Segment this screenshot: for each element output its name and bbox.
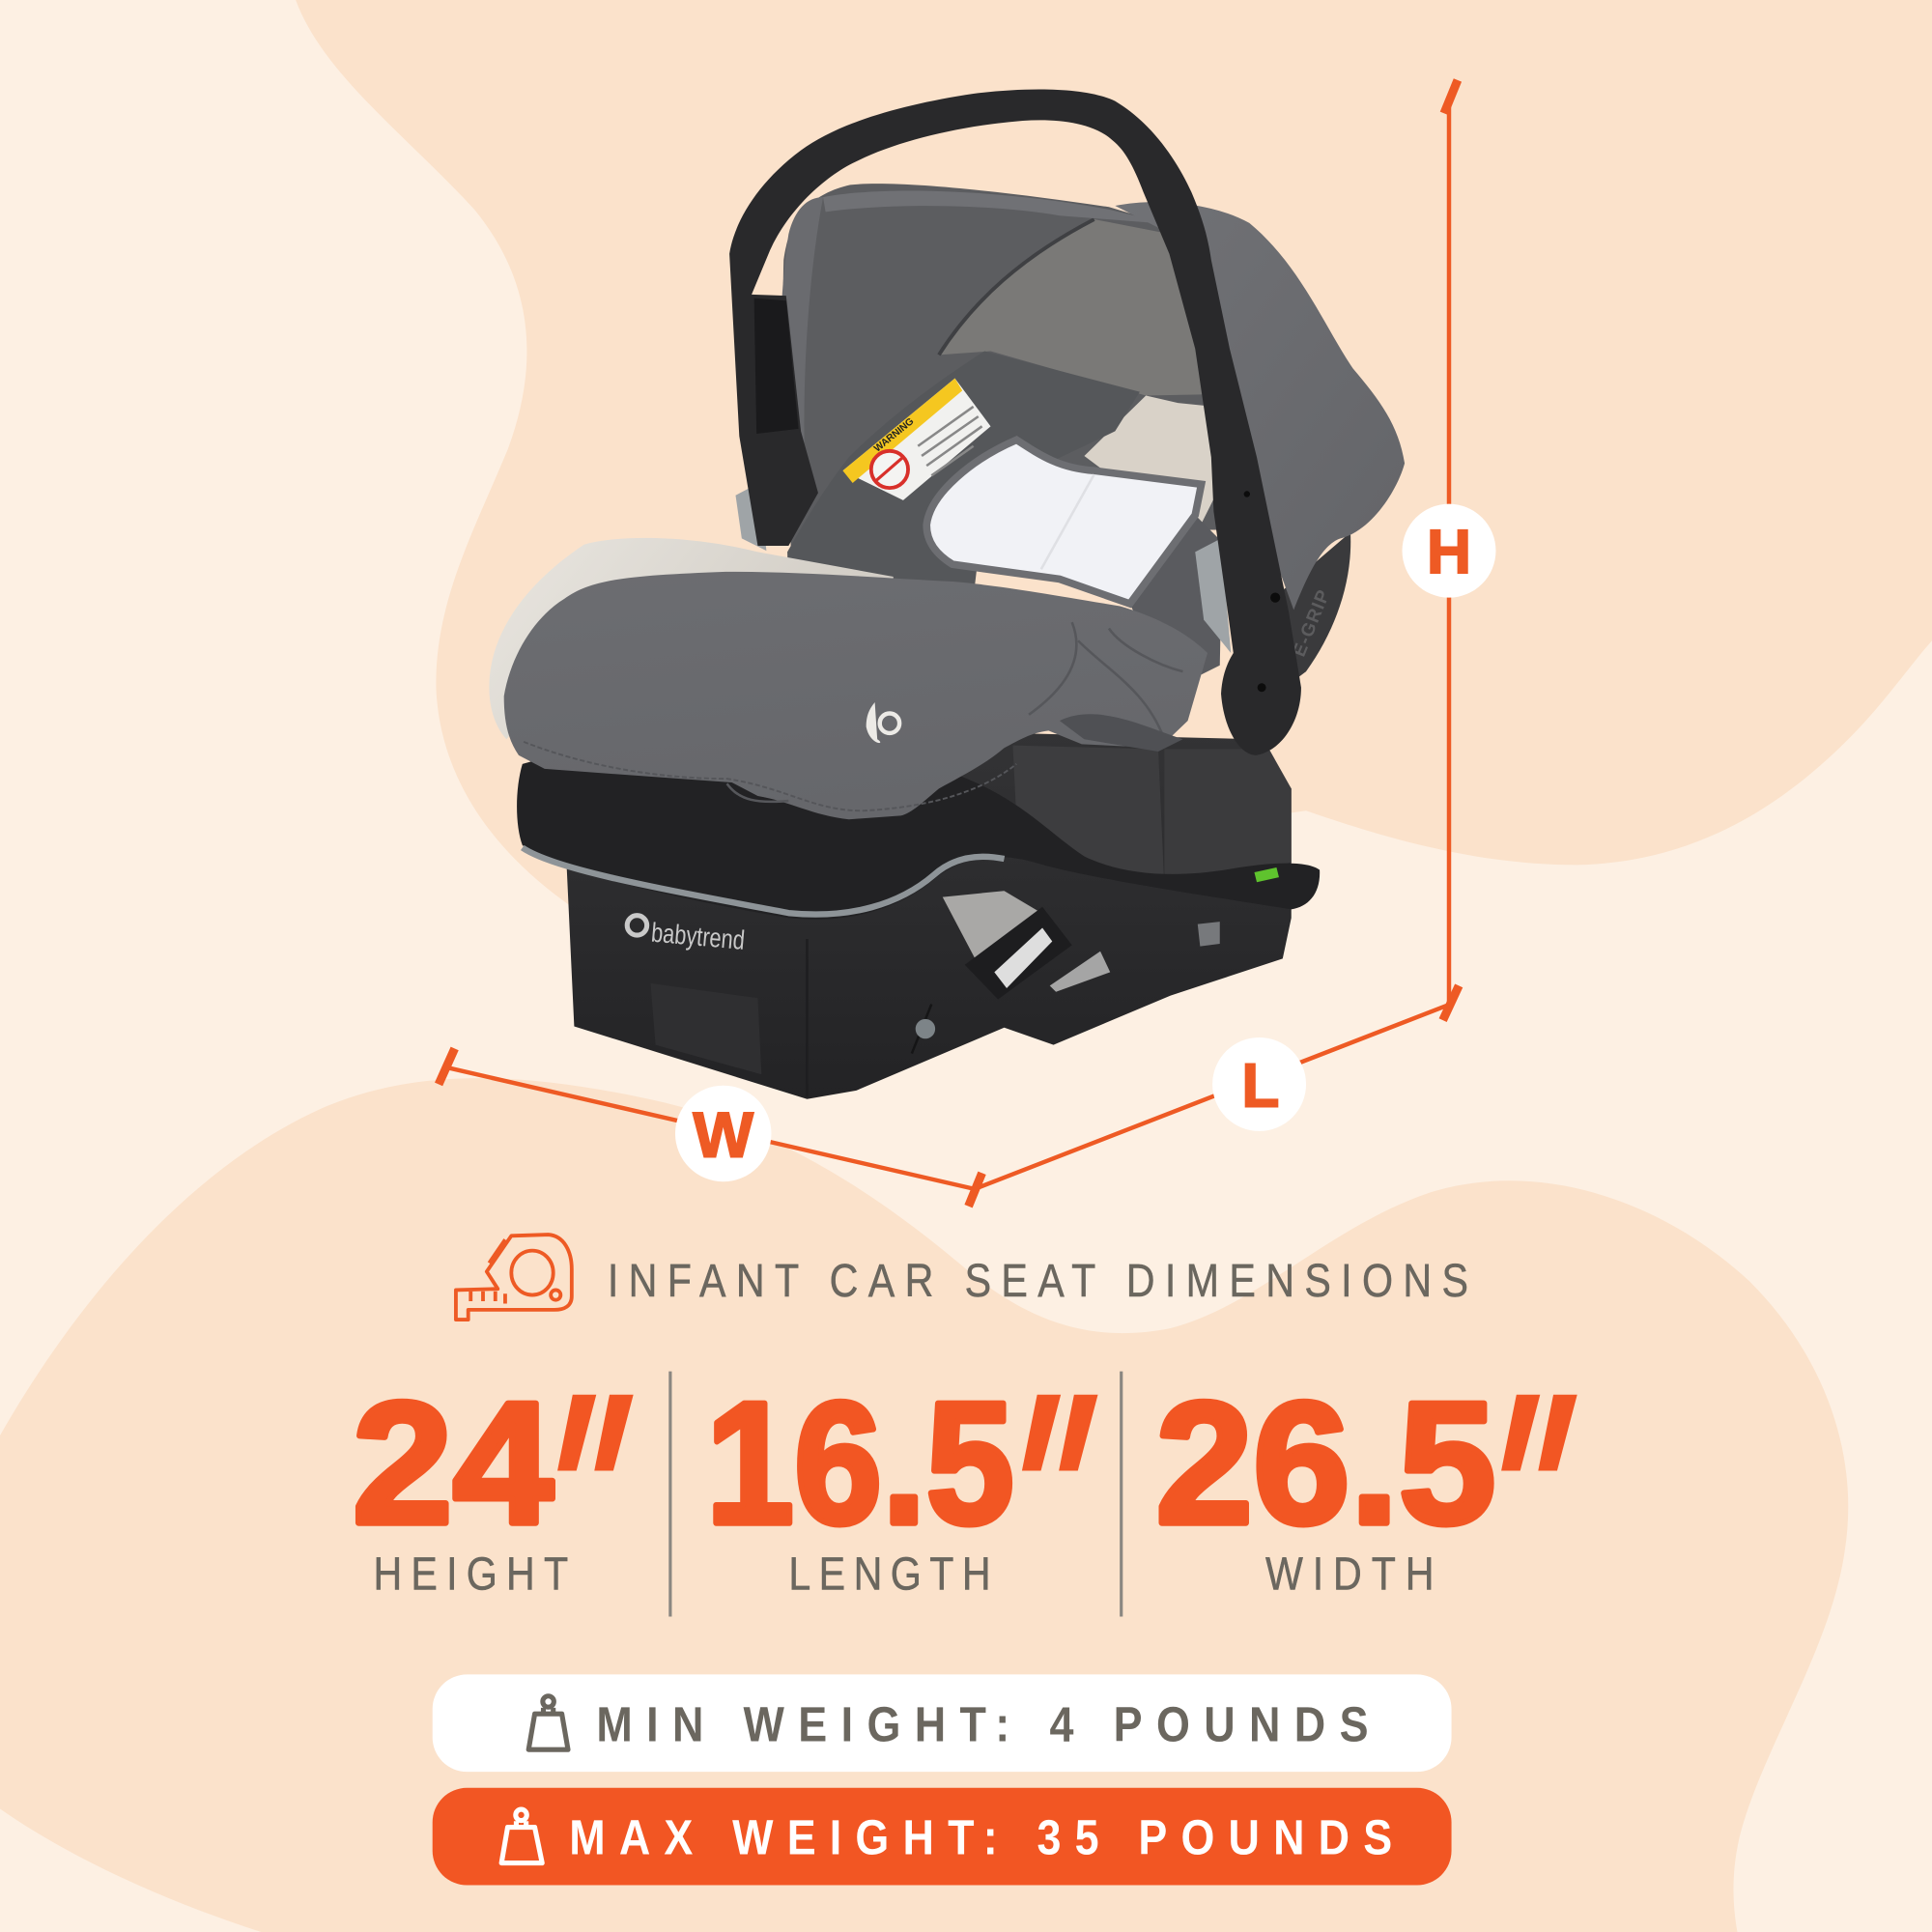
badge: W: W [693, 1100, 753, 1172]
footmuff logo [867, 702, 899, 743]
base tray [517, 752, 1320, 920]
canopy inner [777, 184, 1233, 557]
icon: weight [501, 1809, 542, 1863]
stat: length: " [962, 1328, 1124, 1669]
pill: min weight [433, 1674, 1452, 1772]
top background blob [296, 0, 1932, 912]
gray footmuff [504, 572, 1208, 819]
stat: height [353, 1328, 661, 1669]
badge: L [1212, 1037, 1306, 1131]
divider [1120, 1372, 1122, 1616]
product photo: infant car seat [489, 89, 1405, 1099]
stat: width [1155, 1328, 1605, 1669]
warning label: WARNING [872, 416, 916, 454]
pill: max weight [433, 1788, 1452, 1886]
stat: width: WIDTH [1265, 1547, 1435, 1600]
adjuster knob [912, 1005, 935, 1054]
back shell with E-GRIP [1282, 532, 1350, 690]
lower base box [567, 733, 1292, 1099]
badge: H [1403, 504, 1495, 598]
heading: INFANT CAR SEAT DIMENSIONS [608, 1254, 1468, 1307]
side clips [735, 483, 1231, 653]
dimension line: width [439, 1048, 982, 1207]
stat: length [706, 1328, 1124, 1669]
badge: W [675, 1086, 771, 1181]
dimension line: length [975, 1005, 1450, 1189]
icon: tape measure [456, 1235, 572, 1320]
badge: L: L [1241, 1050, 1279, 1120]
white body pad [926, 440, 1222, 690]
harness strap and buckle [943, 891, 1110, 999]
stat: height: " [497, 1328, 661, 1669]
divider [669, 1372, 671, 1616]
cream footmuff back [489, 538, 894, 739]
babytrend logo [627, 916, 746, 955]
seat cream lining [1084, 395, 1220, 524]
icon: weight [528, 1696, 568, 1749]
dimension line: height [1443, 80, 1459, 1020]
babytrend logo: babytrend [650, 918, 746, 955]
back shell with E-GRIP: E-GRIP [1290, 586, 1335, 660]
stat: width: " [1441, 1328, 1605, 1669]
bottom background blob [0, 1078, 1848, 1932]
carry handle [729, 89, 1301, 755]
stat: height: 24 [353, 1367, 554, 1561]
stat: height: HEIGHT [373, 1547, 568, 1600]
pill: min weight: MIN WEIGHT: 4 POUNDS [596, 1698, 1369, 1752]
badge: H: H [1427, 517, 1471, 586]
head pillow [787, 352, 1140, 598]
warning label [842, 379, 991, 500]
stat: length: LENGTH [788, 1547, 991, 1600]
stat: length: 16.5 [706, 1367, 1014, 1561]
canopy outer [1115, 202, 1405, 610]
pill: max weight: MAX WEIGHT: 35 POUNDS [569, 1811, 1392, 1865]
stat: width: 26.5 [1155, 1367, 1495, 1561]
